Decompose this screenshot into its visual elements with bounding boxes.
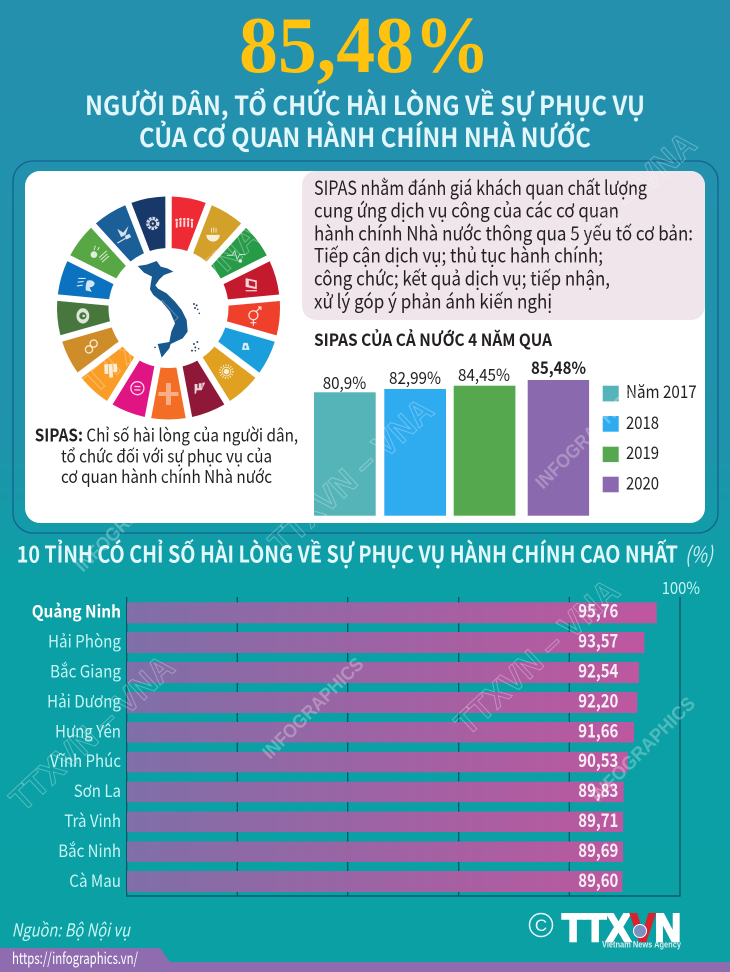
- text: INFOGRAPHICS: [259, 654, 368, 764]
- row: Sơn La: Sơn La: [74, 777, 121, 802]
- segment 5 gender equality: [226, 296, 281, 335]
- row: Bắc Giang: Bắc Giang: [50, 658, 121, 682]
- text: INFOGRAPHICS: [587, 693, 700, 807]
- text: TTXVN – VNA: [448, 572, 627, 743]
- subtitle: NGƯỜI DÂN, TỔ CHỨC HÀI LÒNG VỀ SỰ PHỤC VỤ: [85, 86, 645, 123]
- logo: TTXVN: C: [535, 916, 547, 935]
- text block: SIPAS description: xử lý góp ý phản ánh kiến nghị: [314, 285, 552, 314]
- legend: years: [603, 379, 697, 496]
- segment 14 life below water: [57, 261, 116, 308]
- segment 4 education: [221, 261, 280, 308]
- logo: TTXVN: TTXVN: [562, 907, 681, 950]
- text: INFOGRAPHICS: [72, 467, 181, 577]
- row: Hải Phòng: [48, 628, 644, 654]
- segment 15 life on land: [69, 227, 131, 286]
- row: Hải Dương: Hải Dương: [47, 687, 121, 712]
- text block: SIPAS description: Tiếp cận dịch vụ; thủ tục hành chính;: [314, 239, 603, 268]
- row: Trà Vinh: Trà Vinh: [64, 807, 121, 832]
- segment 13 climate action: [56, 296, 111, 335]
- text: INFOGRAPHICS: [532, 384, 641, 494]
- row: Cà Mau: Cà Mau: [69, 867, 121, 892]
- icon: SDG wheel with Vietnam map: [56, 195, 281, 420]
- legend: years: 2018: [626, 410, 659, 435]
- footer band with URL: [0, 945, 730, 972]
- row: Hưng Yên: 91,66: [578, 717, 618, 743]
- bar chart: SIPAS by year: 82,99%: [389, 364, 441, 389]
- row: Hải Phòng: 93,57: [578, 628, 618, 654]
- row: Cà Mau: [69, 867, 622, 893]
- legend: years: 2019: [626, 440, 659, 465]
- unit label: (%): [685, 538, 714, 570]
- text block: SIPAS definition: cơ quan hành chính Nhà nước: [61, 464, 272, 489]
- segment 6 clean water: [214, 319, 276, 373]
- row: Trà Vinh: 89,71: [578, 807, 618, 833]
- row: Trà Vinh: [64, 807, 623, 833]
- bar chart: SIPAS by year: [314, 354, 589, 516]
- subtitle: CỦA CƠ QUAN HÀNH CHÍNH NHÀ NƯỚC: [139, 118, 591, 155]
- bar chart: SIPAS by year: 85,48%: [531, 354, 586, 379]
- row: Vĩnh Phúc: Vĩnh Phúc: [50, 747, 121, 772]
- bar chart: SIPAS by year: 84,45%: [458, 361, 510, 386]
- text block: SIPAS description: công chức; kết quả dịch vụ; tiếp nhận,: [314, 263, 610, 292]
- row: Bắc Ninh: Bắc Ninh: [58, 837, 121, 862]
- subtitle: [85, 86, 645, 155]
- segment 17 partnerships: [131, 195, 175, 253]
- segment 3 good health: [206, 227, 268, 286]
- row: Hải Dương: [47, 687, 637, 713]
- legend: years: 2020: [626, 471, 659, 496]
- footer band with URL: https://infographics.vn/: [12, 945, 139, 969]
- text block: SIPAS description: SIPAS nhằm đánh giá khách quan chất lượng: [314, 172, 647, 201]
- bar chart: top 10 provinces: 100%: [662, 574, 700, 599]
- row: Vĩnh Phúc: [50, 747, 628, 773]
- segment 9 industry: [151, 367, 186, 420]
- bar chart: top 10 provinces: [32, 574, 700, 896]
- row: Hưng Yên: [55, 717, 634, 743]
- segment 10 reduced inequalities: [112, 357, 163, 418]
- text block: SIPAS definition: SIPAS: Chỉ số hài lòng của người dân,: [35, 423, 298, 448]
- row: Sơn La: 89,83: [578, 777, 618, 803]
- row: Hải Dương: 92,20: [578, 687, 618, 713]
- text block: SIPAS definition: [35, 423, 298, 489]
- legend: years: Năm 2017: [626, 379, 697, 404]
- text: TTXVN – VNA: [525, 125, 704, 296]
- row: Vĩnh Phúc: 90,53: [578, 747, 618, 773]
- text: TTXVN – VNA: [262, 391, 441, 562]
- panel: SIPAS overview: [13, 161, 718, 533]
- text: TTXVN – VNA: [3, 648, 182, 819]
- row: Hải Phòng: Hải Phòng: [48, 628, 121, 653]
- row: Bắc Giang: [50, 658, 639, 684]
- row: Cà Mau: 89,60: [578, 867, 618, 893]
- segment 8 decent work: [174, 357, 225, 418]
- source note: Nguồn: Bộ Nội vụ: [12, 917, 131, 943]
- row: Quảng Ninh: Quảng Ninh: [32, 598, 121, 623]
- row: Sơn La: [74, 777, 624, 803]
- text block: SIPAS description: [302, 171, 705, 320]
- logo: TTXVN: Vietnam News Agency: [602, 940, 682, 951]
- row: Bắc Giang: 92,54: [578, 658, 618, 684]
- icon: Vietnam map: [138, 261, 200, 358]
- title: 85,48%: 85,48: [239, 2, 414, 90]
- heading: SIPAS 4 years: SIPAS CỦA CẢ NƯỚC 4 NĂM QUA: [314, 326, 552, 351]
- row: Bắc Ninh: [58, 837, 623, 863]
- row: Quảng Ninh: 95,76: [578, 598, 618, 624]
- row: Hưng Yên: Hưng Yên: [55, 717, 121, 742]
- segment 12 responsible consumption: [61, 319, 123, 373]
- text block: SIPAS description: cung ứng dịch vụ công của các cơ quan: [314, 195, 619, 224]
- title: 85,48%: %: [414, 2, 490, 90]
- text: TTXVN – VNA: [75, 216, 269, 401]
- row: Bắc Ninh: 89,69: [578, 837, 618, 863]
- segment 7 energy: [196, 340, 256, 402]
- segment 16 peace and justice: [95, 204, 152, 266]
- text block: SIPAS definition: tổ chức đối với sự phục vụ của: [61, 444, 272, 469]
- bar chart: SIPAS by year: 80,9%: [323, 369, 366, 394]
- segment 1 no poverty: [162, 195, 206, 253]
- segment 11 sustainable cities: [81, 340, 141, 402]
- row: Quảng Ninh: [32, 598, 657, 624]
- segment 2 zero hunger: [185, 204, 242, 267]
